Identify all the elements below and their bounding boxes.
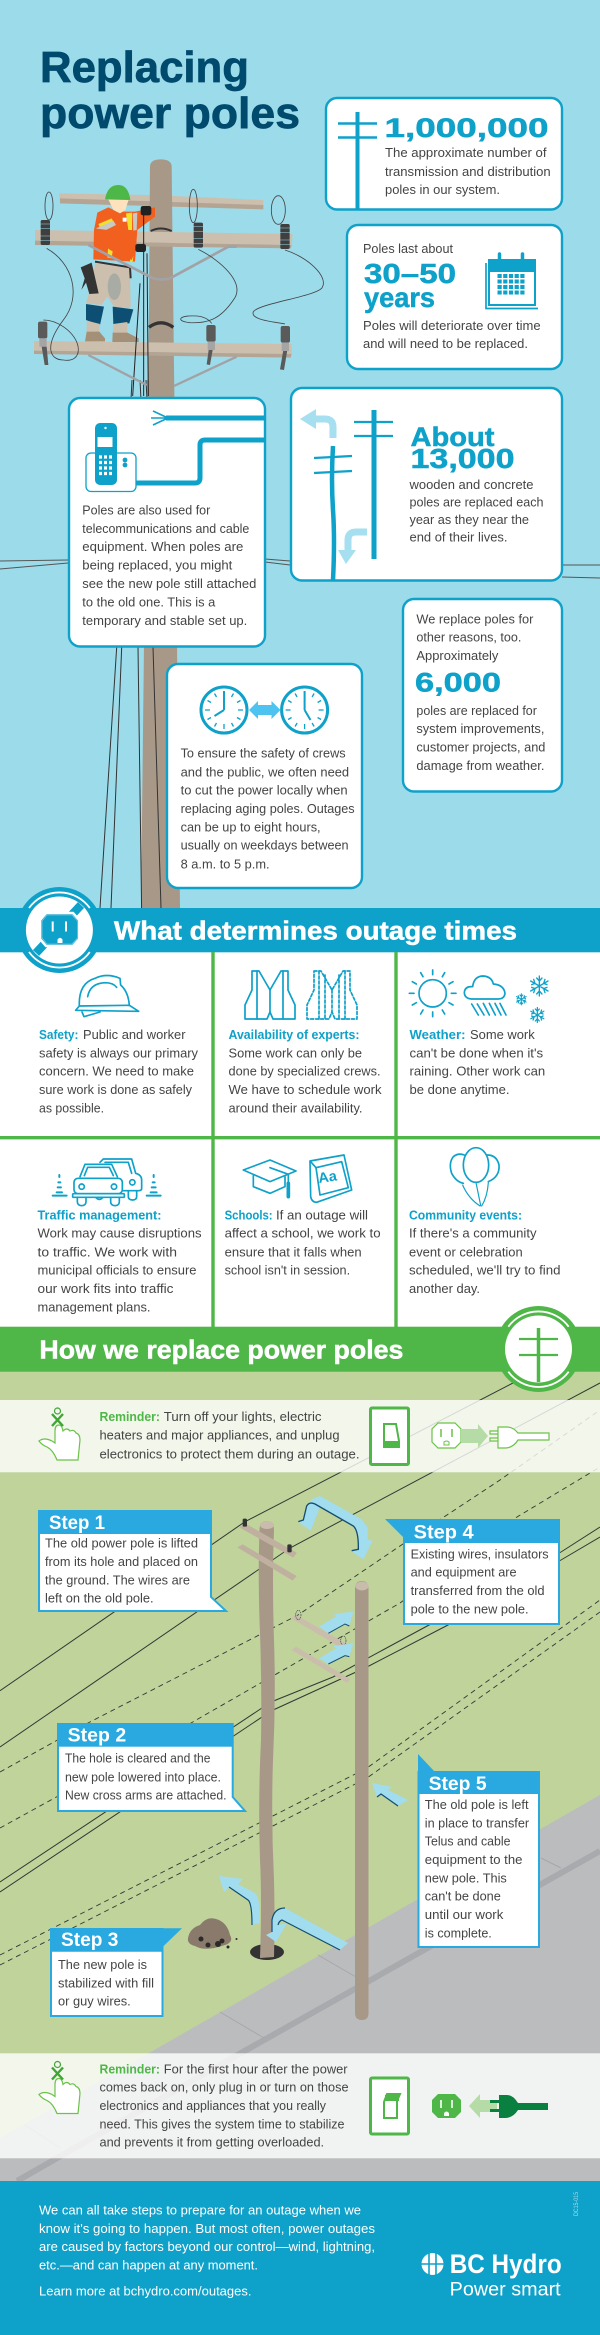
cell: safety [39, 975, 199, 1116]
panel: outage hours: and the public, we often need [181, 764, 349, 779]
title: power poles [40, 89, 300, 138]
stat: one million: 1,000,000 [384, 113, 548, 143]
panel: pole lifespan [347, 225, 562, 369]
dirt pile [188, 1918, 238, 1949]
icon: cable lines [136, 411, 264, 483]
cell: weather: Weather: [410, 1027, 466, 1042]
stat: about 13,000 [410, 422, 514, 474]
panel: telecom equipment: equipment. When poles are [82, 539, 243, 554]
callout: step 1: The old power pole is lifted [45, 1536, 198, 1551]
text: reminder: comes back on, only plug in or turn on those [100, 2080, 348, 2095]
panel: 6,000 poles: customer projects, and [416, 740, 545, 755]
panel: outage hours: to cut the power locally when [181, 782, 348, 797]
text: reminder: For the first hour after the power [164, 2061, 348, 2076]
icon: light switch on [370, 2078, 408, 2134]
cell: safety: Public and worker [83, 1027, 186, 1042]
callout: step 5: in place to transfer [425, 1815, 530, 1830]
callout: step 2 [57, 1723, 245, 1811]
lower arrows [219, 1876, 260, 1925]
section banner: what determines outage times [0, 908, 600, 952]
icon: balloons [450, 1148, 499, 1206]
panel: telecom equipment: Poles are also used for [82, 502, 211, 517]
cell: safety: as possible. [39, 1101, 104, 1116]
text: system size [385, 145, 551, 197]
cell: traffic management: Traffic management: [38, 1207, 162, 1222]
panel: 1,000,000 poles [326, 98, 562, 210]
text: preparing for outages: etc.—and can happen at any moment. [39, 2258, 258, 2273]
cell: traffic management: Work may cause disruptions [38, 1226, 202, 1241]
reminder panel: after the outage [0, 2053, 600, 2158]
reminder panel: before the outage [0, 1400, 600, 1472]
cell: community events: If there's a community [409, 1226, 537, 1241]
cross arms and upper arrows [237, 1496, 373, 1683]
icon: clocks [201, 687, 328, 733]
panel: pole lifespan: and will need to be replaced. [363, 336, 528, 351]
panel: telecom equipment [69, 398, 265, 646]
logo: BC Hydro Power smart [422, 2249, 562, 2301]
text: reminder: electronics and appliances that you really [100, 2098, 327, 2113]
panel: 6,000 poles: other reasons, too. [416, 630, 521, 645]
panel: 13,000 poles: poles are replaced each [410, 495, 544, 510]
old pole [259, 1521, 275, 1958]
callout: step 5: can't be done [425, 1889, 501, 1904]
callout: step 4 [385, 1519, 560, 1624]
callout: step 3: The new pole is [58, 1957, 147, 1972]
cell: traffic management: management plans. [38, 1299, 150, 1314]
callout: step 3 [50, 1928, 182, 2016]
text: reminder: need. This gives the system time to stabilize [100, 2116, 344, 2131]
callout: step 5: Step 5 [429, 1774, 487, 1795]
overhead wires [0, 1383, 600, 1965]
text: reminder: heaters and major appliances, and unplug [100, 1428, 340, 1443]
callout: step 2: The hole is cleared and the [65, 1751, 210, 1766]
panel: 6,000 poles [403, 599, 562, 792]
text: preparing for outages [39, 2202, 375, 2299]
callout: step 5: equipment to the [425, 1852, 522, 1867]
icon: cars and cones [53, 1159, 161, 1206]
callout: step 4: transferred from the old [411, 1583, 545, 1598]
icon label: book letters: Aa [317, 1168, 339, 1187]
panel: 6,000 poles: poles are replaced for [416, 703, 538, 718]
panel: 13,000 poles [291, 388, 562, 580]
cell: safety: Safety: [39, 1027, 78, 1042]
panel: outage hours: replacing aging poles. Outages [181, 801, 355, 816]
text: document code: DC15-015 [574, 2191, 580, 2216]
callout: step 5 [418, 1754, 540, 1947]
callout: step 4: Step 4 [414, 1522, 474, 1543]
cell: weather [409, 970, 548, 1097]
icon: old and new poles with arrows [300, 409, 393, 580]
section banner: how we replace power poles: How we replace power poles [39, 1334, 403, 1364]
wires and lower pole behind cards [0, 380, 600, 908]
footer [0, 2181, 600, 2335]
cell: availability of experts: around their availability. [228, 1101, 362, 1116]
icon: safety vests [245, 971, 357, 1019]
callout: step 1: from its hole and placed on [45, 1554, 198, 1569]
text: reminder: Reminder: [100, 1409, 160, 1424]
panel: 6,000 poles: system improvements, [416, 721, 544, 736]
hole [250, 1944, 284, 1960]
callout: step 1 [38, 1510, 226, 1611]
callout: step 4: pole to the new pole. [411, 1601, 529, 1616]
icon: outlet and unplugged cord [432, 1423, 549, 1448]
text: reminder: and prevents it from getting overloaded. [100, 2135, 324, 2150]
icon: outlet and plug going in [432, 2094, 548, 2118]
callout: step 1: Step 1 [49, 1513, 105, 1534]
panel: telecom equipment: telecommunications and cable [82, 521, 249, 536]
panel: outage hours: usually on weekdays between [181, 838, 349, 853]
grid dividers [0, 952, 600, 1327]
cell: availability of experts: We have to schedule work [228, 1082, 382, 1097]
panel: outage hours: can be up to eight hours, [181, 819, 321, 834]
callout: step 4: Existing wires, insulators [411, 1546, 549, 1561]
stat: about 13,000: About [410, 422, 495, 452]
panel: 6,000 poles: We replace poles for [416, 611, 534, 626]
callout: step 1: the ground. The wires are [45, 1572, 190, 1587]
stat: 6,000: 6,000 [415, 668, 501, 698]
callout: step 3: stabilized with fill [58, 1975, 154, 1990]
cell: safety: concern. We need to make [39, 1064, 194, 1079]
cell: weather: be done anytime. [410, 1082, 510, 1097]
panel: 13,000 poles: year as they near the [410, 512, 529, 527]
cell: community events [409, 1148, 560, 1296]
panel: 13,000 poles: end of their lives. [410, 529, 508, 544]
panel: pole lifespan: Poles will deteriorate over time [363, 318, 541, 333]
icon: graduation cap and book [243, 1155, 352, 1202]
callout: step 2: Step 2 [68, 1726, 126, 1747]
icon: calendar [486, 254, 538, 308]
section banner: how we replace power poles [0, 1327, 600, 1372]
callout: step 3: Step 3 [61, 1930, 118, 1951]
panel: outage hours: To ensure the safety of crews [181, 746, 346, 761]
text: system size: The approximate number of [385, 145, 547, 160]
icon: light switch off [370, 1408, 408, 1464]
section: white grid background [0, 952, 600, 1327]
cell: schools: If an outage will [276, 1207, 368, 1222]
stat: 30-50 years: years [364, 282, 435, 313]
icon: hard hat [76, 975, 139, 1017]
panel: 6,000 poles: damage from weather. [416, 758, 544, 773]
cell: availability of experts: Some work can only be [228, 1045, 362, 1060]
panel: 6,000 poles: Approximately [416, 648, 499, 663]
text: preparing for outages: Learn more at bchydro.com/outages. [39, 2284, 252, 2299]
panel: outage hours [167, 664, 362, 888]
icon: finger with string [39, 2062, 80, 2114]
old and new poles with arrows [188, 1496, 408, 2020]
cell: safety: safety is always our primary [39, 1045, 199, 1060]
new pole [355, 1581, 368, 2020]
callout: step 5: until our work [425, 1907, 504, 1922]
panel: outage hours: 8 a.m. to 5 p.m. [181, 856, 270, 871]
text: reminder: Reminder: [100, 2061, 160, 2076]
callout: step 2: New cross arms are attached. [65, 1787, 226, 1802]
icon: power pole badge [496, 1306, 582, 1392]
text: preparing for outages: know it's going to happen. But most often, power outages [39, 2221, 375, 2236]
text: reminder [100, 1409, 360, 1461]
title [40, 43, 300, 138]
cell: traffic management [38, 1159, 202, 1314]
cell: schools [225, 1155, 381, 1278]
panel: telecom equipment: temporary and stable set up. [82, 613, 247, 628]
cell: community events: scheduled, we'll try to find [409, 1263, 560, 1278]
text: system size: poles in our system. [385, 182, 500, 197]
cell: schools: school isn't in session. [225, 1263, 350, 1278]
callout: step 2: new pole lowered into place. [65, 1770, 221, 1785]
callout: step 5: new pole. This [425, 1870, 507, 1885]
panel: pole lifespan: Poles last about [363, 241, 453, 256]
text: preparing for outages: We can all take steps to prepare for an outage when we [39, 2202, 361, 2217]
callout: step 5: The old pole is left [425, 1797, 529, 1812]
cell: community events: event or celebration [409, 1244, 523, 1259]
text: system size: transmission and distribution [385, 164, 551, 179]
callout: step 4: and equipment are [411, 1565, 517, 1580]
cell: traffic management: our work fits into traffic [38, 1281, 174, 1296]
callout: step 1: left on the old pole. [45, 1591, 154, 1606]
callout: step 3: or guy wires. [58, 1994, 131, 2009]
panel: telecom equipment: to the old one. This is a [82, 594, 216, 609]
cell: schools: affect a school, we work to [225, 1226, 381, 1241]
logo: BC Hydro Power smart: BC Hydro [450, 2249, 562, 2279]
icon: finger with string [39, 1408, 80, 1460]
text: reminder [100, 2061, 348, 2150]
section: steps scene background [0, 1370, 600, 2181]
cell: safety: sure work is done as safely [39, 1082, 193, 1097]
section banner: what determines outage times: What determines outage times [114, 915, 517, 945]
text: reminder: electronics to protect them during an outage. [100, 1446, 360, 1461]
stat: 30-50 years [364, 258, 456, 313]
stat: about 13,000: 13,000 [410, 443, 514, 474]
icon: cordless phone [86, 423, 136, 492]
cell: traffic management: to traffic. We work with [38, 1244, 177, 1259]
cell: schools: Schools: [225, 1207, 273, 1222]
illustration: line worker on pole [34, 159, 323, 397]
text: reminder: Turn off your lights, electric [164, 1409, 322, 1424]
cell: weather: Some work [470, 1027, 535, 1042]
panel: telecom equipment: see the new pole still attached [82, 576, 256, 591]
text: preparing for outages: are caused by factors beyond our control—wind, lightning, [39, 2239, 375, 2254]
panel: telecom equipment: being replaced, you might [82, 558, 233, 573]
cell: community events: another day. [409, 1281, 480, 1296]
icon: sun, rain, snow [409, 970, 548, 1022]
cell: weather: can't be done when it's [410, 1045, 543, 1060]
cell: schools: ensure that it falls when [225, 1244, 362, 1259]
icon: power pole [338, 112, 377, 209]
cell: availability of experts: done by specialized crews. [228, 1064, 380, 1079]
logo: BC Hydro Power smart: Power smart [450, 2280, 561, 2301]
callout: step 5: is complete. [425, 1925, 492, 1940]
icon: no-power outlet badge [16, 887, 102, 973]
callout: step 5: Telus and cable [425, 1834, 510, 1849]
title: Replacing [40, 43, 249, 92]
cell: availability of experts [228, 971, 382, 1116]
stat: 30-50 years: 30–50 [364, 258, 456, 289]
cell: traffic management: municipal officials to ensure [38, 1263, 197, 1278]
panel: 13,000 poles: wooden and concrete [408, 477, 534, 492]
cell: weather: raining. Other work can [410, 1064, 545, 1079]
cell: availability of experts: Availability of experts: [228, 1027, 360, 1042]
cell: community events: Community events: [409, 1207, 522, 1222]
